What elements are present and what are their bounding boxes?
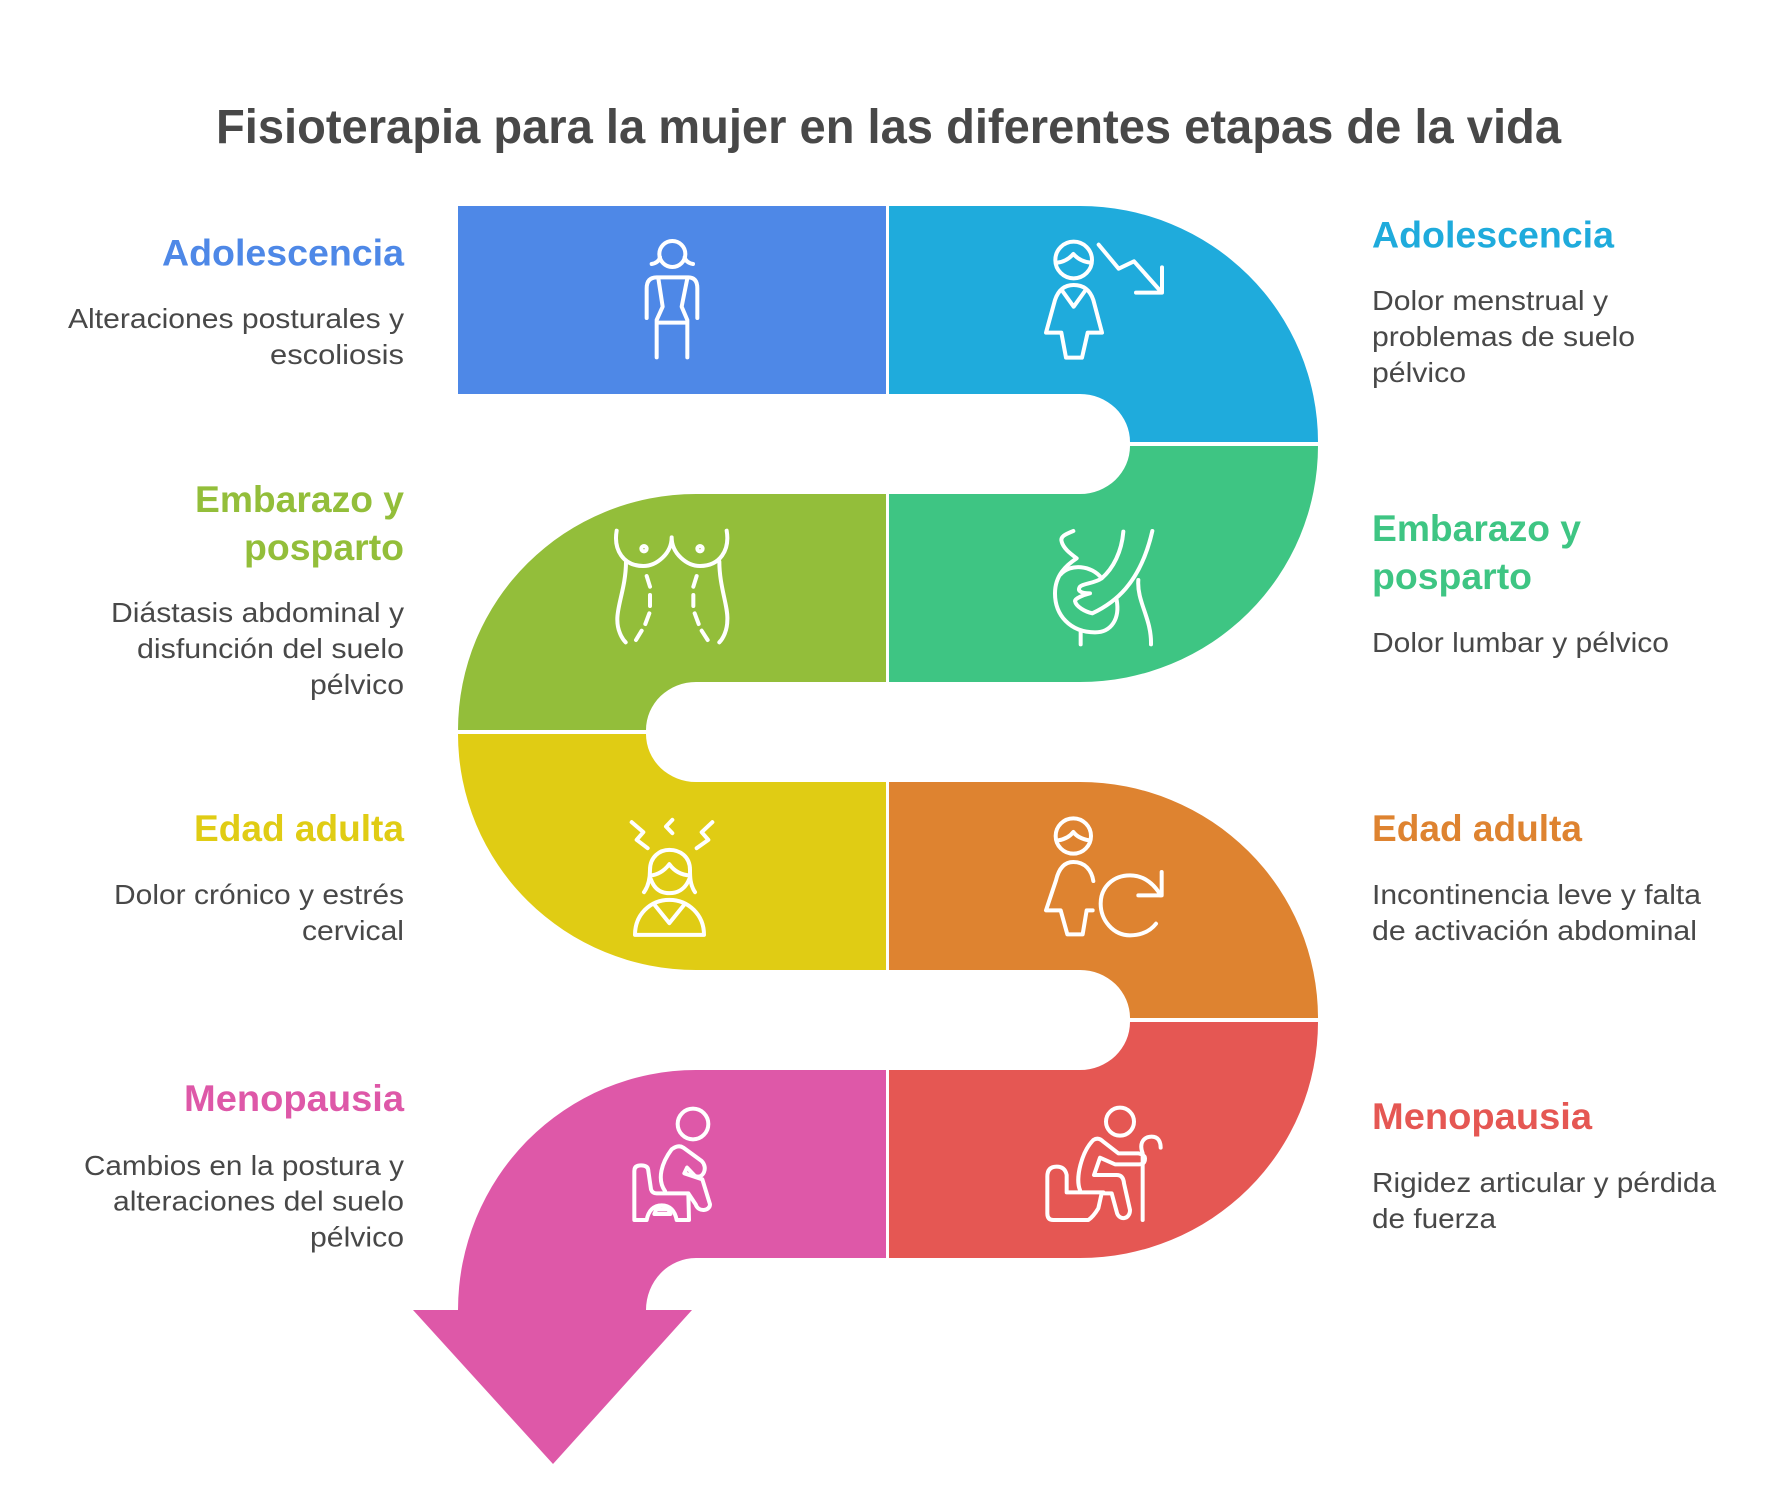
text block: adolescencia right: Adolescencia (1372, 214, 1614, 256)
text block: menopausia left: Menopausia (184, 1078, 404, 1119)
panel: edad adulta right segment (889, 782, 1318, 1018)
text block: embarazo right (1372, 508, 1669, 658)
panel: embarazo right segment (889, 446, 1318, 682)
text block: menopausia right: Rigidez articular y pérdida (1372, 1167, 1716, 1198)
panel: menopausia left segment with arrow (413, 1070, 886, 1464)
text block: adolescencia right: pélvico (1372, 357, 1466, 388)
panel: embarazo left segment (458, 494, 886, 730)
icon: pregnant belly (1055, 531, 1152, 644)
icon: woman with cycle arrow (1046, 818, 1162, 935)
icon: torso with abdominal diastasis (616, 531, 727, 642)
text block: menopausia left: alteraciones del suelo (113, 1186, 404, 1216)
text block: edad adulta left: Edad adulta (194, 808, 404, 849)
text block: adolescencia right: Dolor menstrual y (1372, 285, 1608, 316)
icon: standing woman posture (647, 241, 697, 357)
text block: edad adulta left: Dolor crónico y estrés (114, 879, 404, 910)
text block: menopausia left: Cambios en la postura y (84, 1150, 404, 1181)
text block: embarazo left: Diástasis abdominal y (111, 597, 404, 628)
text block: menopausia left (84, 1078, 404, 1252)
text block: adolescencia right: problemas de suelo (1372, 321, 1635, 352)
text block: edad adulta right (1372, 808, 1701, 946)
text block: embarazo left: posparto (244, 527, 404, 568)
icon: woman with stress (632, 820, 712, 935)
icon: woman with descending arrow (1046, 242, 1162, 358)
icon: seated person on potty (634, 1109, 710, 1220)
text block: menopausia right: Menopausia (1372, 1096, 1592, 1137)
text block: adolescencia left (68, 232, 404, 370)
panel: adolescencia left segment (458, 206, 886, 394)
panel: adolescencia right segment (889, 206, 1318, 442)
text block: embarazo left (111, 479, 404, 700)
text block: embarazo right: Embarazo y (1372, 508, 1581, 549)
text block: adolescencia left: escoliosis (270, 339, 404, 370)
panel: edad adulta left segment (458, 734, 886, 970)
text block: adolescencia right (1372, 214, 1635, 388)
text block: embarazo left: disfunción del suelo (137, 633, 404, 664)
title: Fisioterapia para la mujer en las diferentes etapas de la vida (216, 101, 1561, 154)
text block: edad adulta right: de activación abdominal (1372, 915, 1697, 946)
text block: menopausia right (1372, 1096, 1716, 1234)
text block: edad adulta right: Incontinencia leve y falta (1372, 879, 1701, 910)
text block: edad adulta left: cervical (302, 915, 404, 946)
panel: menopausia right segment (889, 1022, 1318, 1258)
text block: embarazo right: posparto (1372, 556, 1532, 597)
text block: embarazo right: Dolor lumbar y pélvico (1372, 627, 1669, 658)
text block: embarazo left: pélvico (310, 669, 404, 700)
text block: edad adulta left (114, 808, 404, 946)
text block: adolescencia left: Alteraciones posturales y (68, 303, 404, 334)
text block: adolescencia left: Adolescencia (162, 232, 404, 274)
text block: embarazo left: Embarazo y (195, 479, 404, 520)
text block: menopausia right: de fuerza (1372, 1203, 1496, 1234)
icon: seated person with cane (1047, 1108, 1161, 1220)
text block: menopausia left: pélvico (310, 1222, 404, 1252)
text block: edad adulta right: Edad adulta (1372, 808, 1582, 849)
